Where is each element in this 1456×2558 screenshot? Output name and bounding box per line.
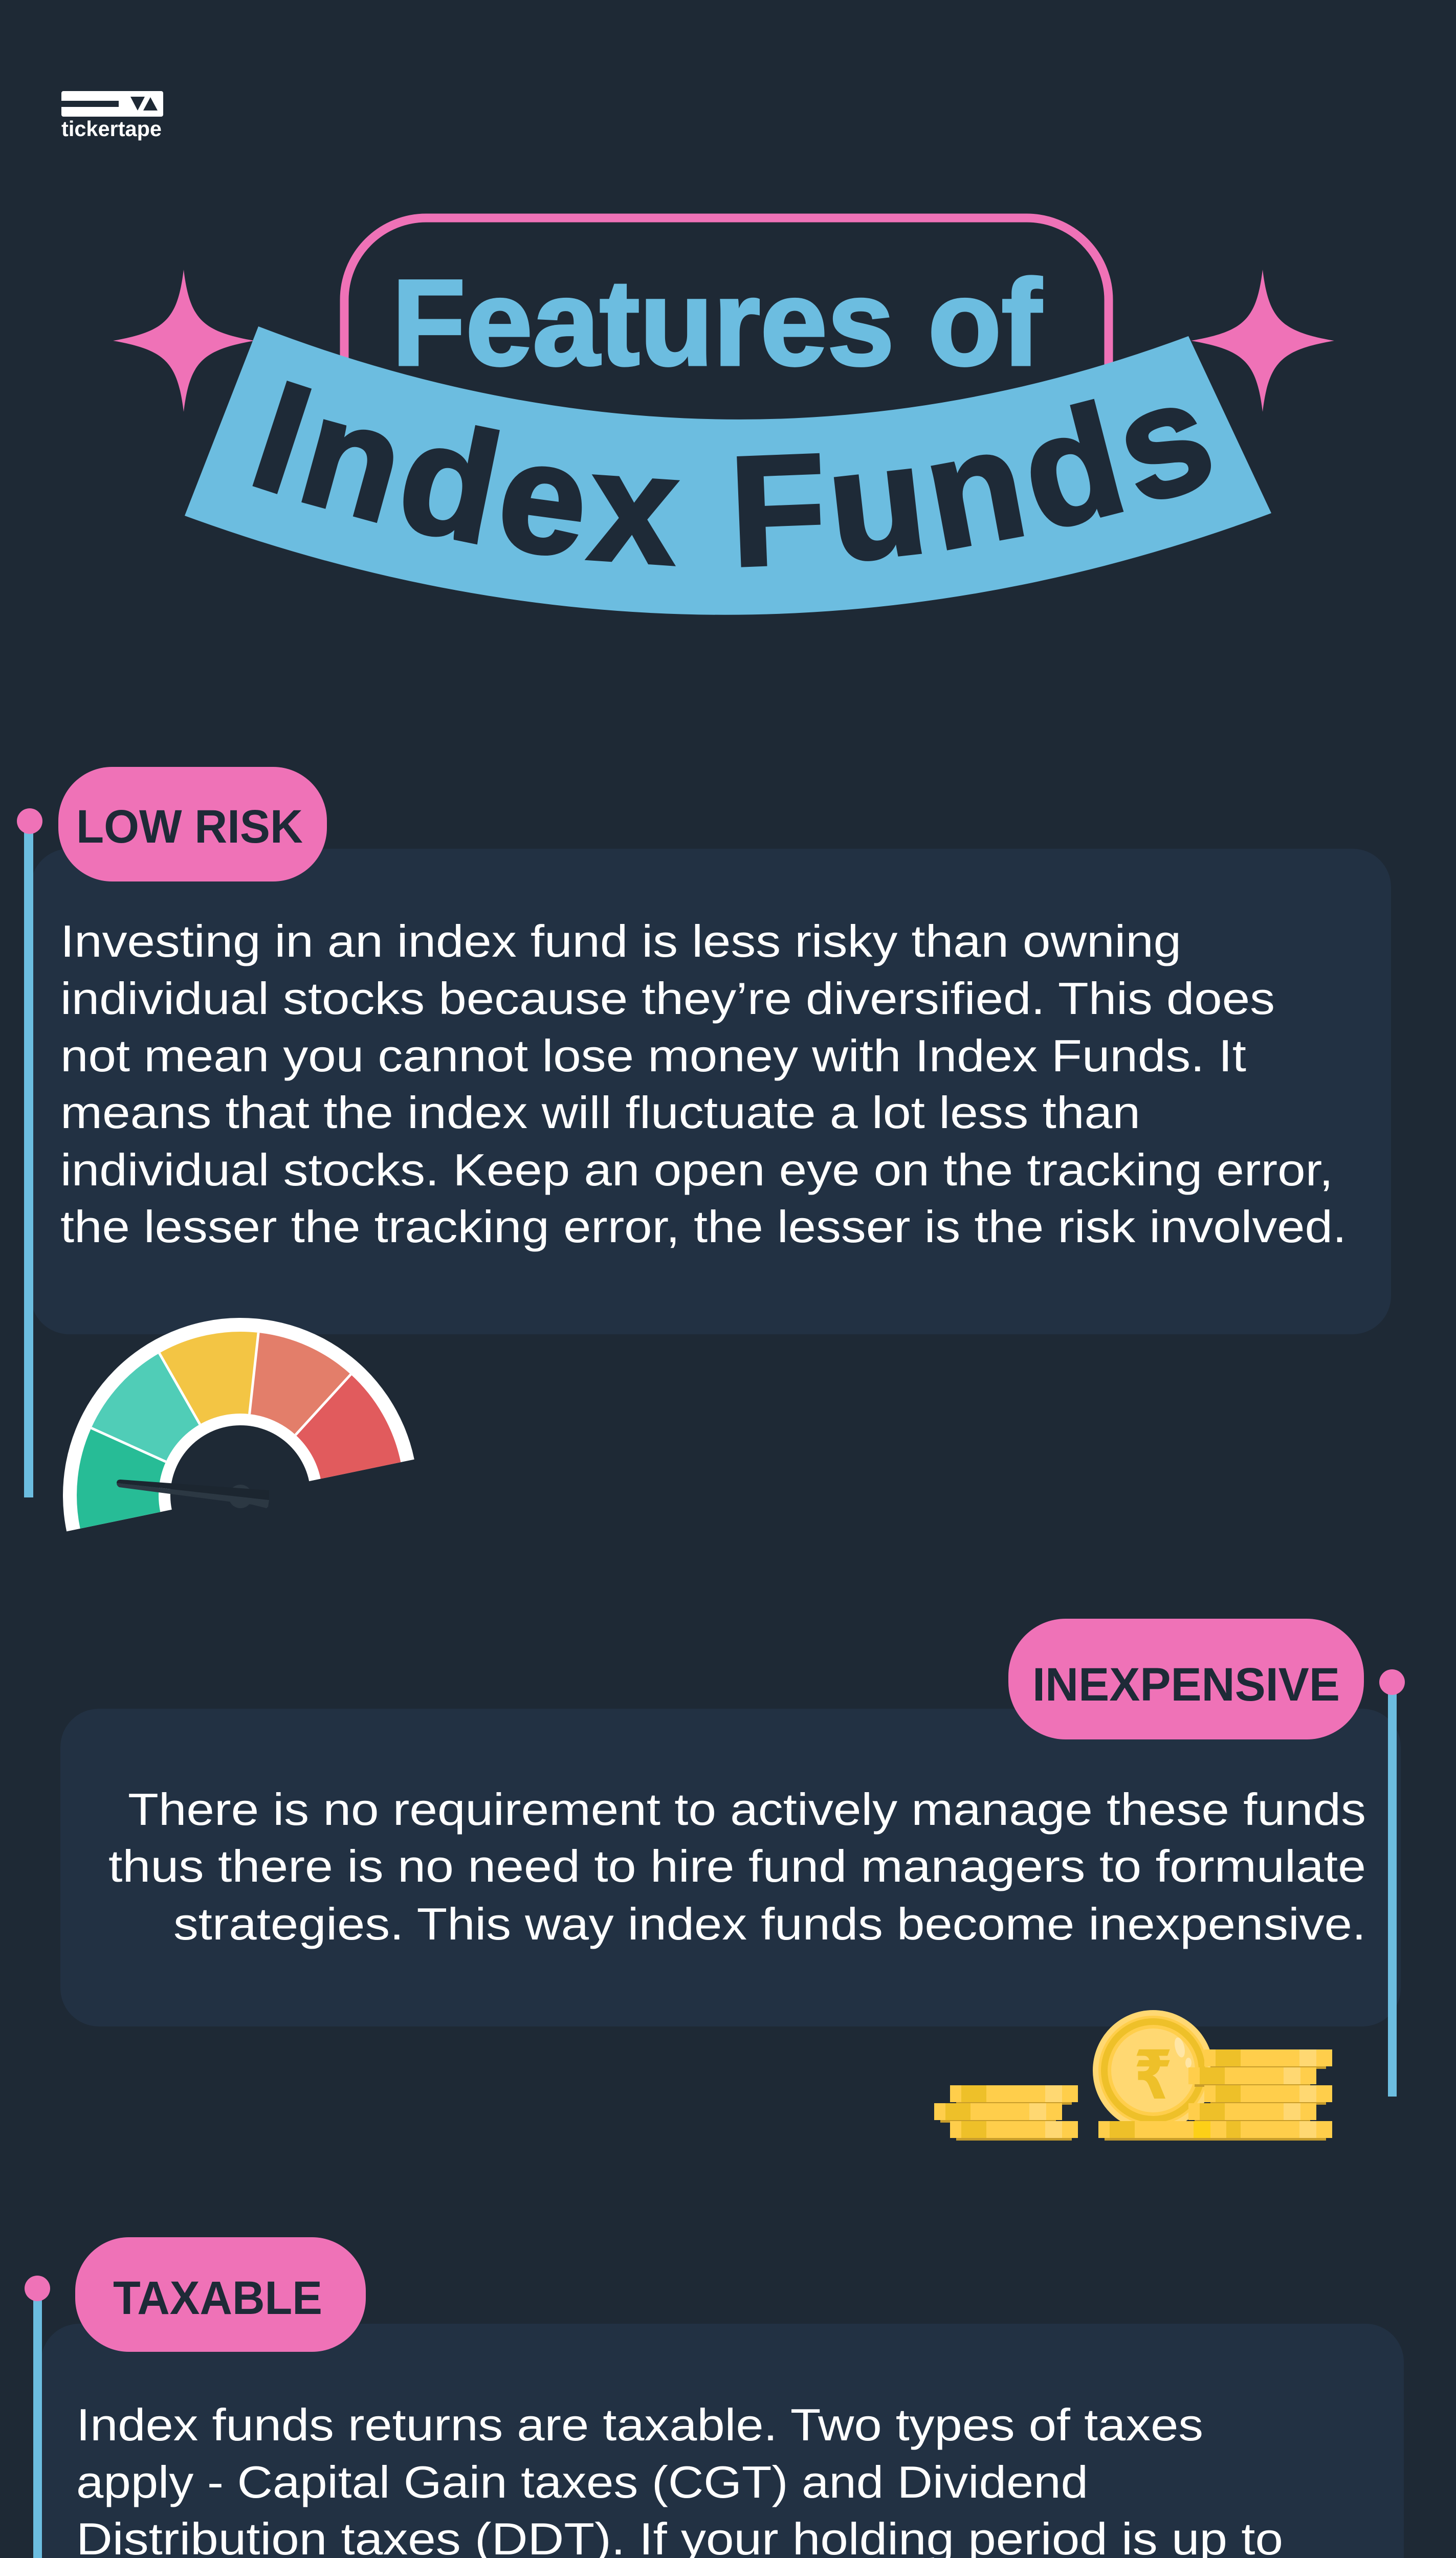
- body text: inexpensive: thus there is no need to hire fund managers to formulate: [108, 1841, 1366, 1891]
- title frame: [344, 218, 1109, 389]
- timeline: taxable: [25, 2276, 50, 2558]
- panel: low risk: [31, 849, 1391, 1334]
- icon: left star: [113, 270, 254, 412]
- body text: low risk: individual stocks because they’re diversified. This does: [60, 973, 1275, 1024]
- body text: taxable: apply - Capital Gain taxes (CGT) and Dividend: [76, 2457, 1088, 2507]
- body text: taxable: Index funds returns are taxable. Two types of taxes: [76, 2399, 1203, 2450]
- body text: low risk: Investing in an index fund is less risky than owning: [60, 916, 1181, 966]
- logo: tickertape: tickertape: [61, 117, 162, 141]
- body text: low risk: individual stocks. Keep an open eye on the tracking error,: [60, 1144, 1333, 1195]
- icon: rupee coins: ₹: [1134, 2036, 1173, 2115]
- logo: tickertape: [61, 91, 163, 141]
- heading: inexpensive: [1008, 1619, 1364, 1739]
- timeline: inexpensive: [1379, 1669, 1405, 2097]
- heading: low risk: [58, 767, 327, 881]
- body text: taxable: [76, 2399, 1298, 2558]
- title: Index Funds: Index Funds: [252, 381, 1211, 567]
- body text: inexpensive: There is no requirement to actively manage these funds: [128, 1784, 1366, 1835]
- timeline: low risk: [17, 808, 42, 1497]
- body text: low risk: [60, 916, 1347, 1252]
- title banner: [185, 326, 1271, 615]
- heading: inexpensive: INEXPENSIVE: [1032, 1659, 1340, 1711]
- heading: low risk: LOW RISK: [76, 801, 303, 853]
- panel: inexpensive: [60, 1709, 1401, 2026]
- icon: risk gauge: [63, 1318, 414, 1531]
- body text: low risk: means that the index will fluctuate a lot less than: [60, 1087, 1140, 1138]
- panel: taxable: [41, 2324, 1404, 2558]
- body text: low risk: the lesser the tracking error, the lesser is the risk involved.: [60, 1201, 1347, 1252]
- icon: rupee coins: [934, 2010, 1332, 2141]
- heading: taxable: [75, 2237, 366, 2352]
- body text: low risk: not mean you cannot lose money with Index Funds. It: [60, 1030, 1246, 1081]
- body text: inexpensive: [108, 1784, 1366, 1949]
- icon: right star: [1191, 270, 1334, 412]
- title: Features of: Features of: [392, 254, 1042, 391]
- body text: inexpensive: strategies. This way index funds become inexpensive.: [173, 1899, 1366, 1949]
- heading: taxable: TAXABLE: [113, 2272, 322, 2324]
